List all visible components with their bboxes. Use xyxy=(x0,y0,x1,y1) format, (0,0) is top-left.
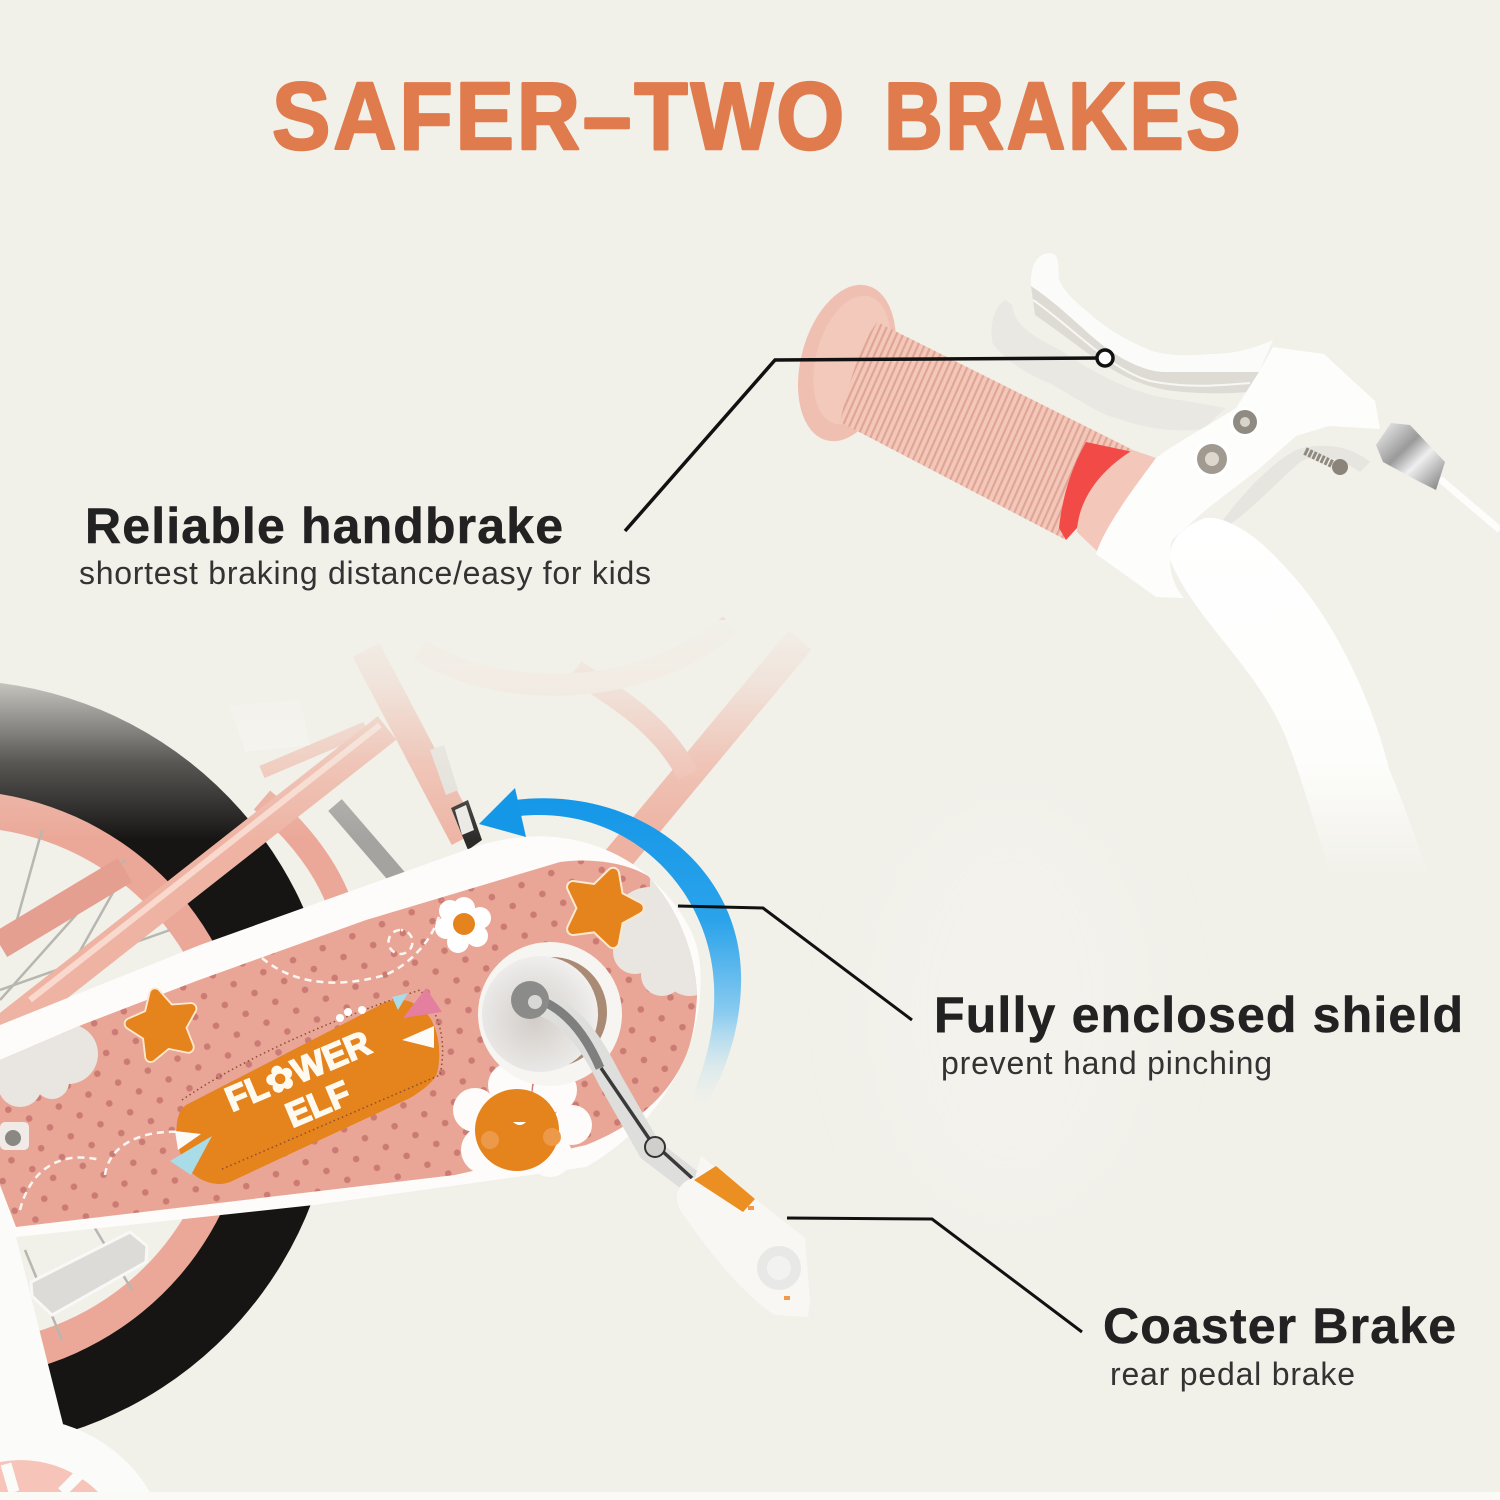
clamp screws xyxy=(1193,407,1348,478)
leader line: handbrake xyxy=(625,350,1113,531)
callout: reliable handbrake xyxy=(79,498,651,591)
brake lever xyxy=(1031,253,1273,393)
illustration: handlebar and brake lever xyxy=(782,253,1500,910)
flower elf badge: ELF xyxy=(280,1074,356,1135)
illustration: rear wheel and frame xyxy=(0,620,820,1447)
guard white shell xyxy=(0,836,701,1237)
flower elf badge xyxy=(176,990,443,1184)
callout: coaster brake: Coaster Brake xyxy=(1103,1298,1456,1354)
title: SAFER–TWO xyxy=(272,63,847,170)
callout: fully enclosed shield: Fully enclosed shield xyxy=(934,987,1463,1043)
callout: coaster brake xyxy=(1103,1298,1456,1392)
flower xyxy=(435,897,491,953)
fender piece xyxy=(262,800,340,905)
callout: coaster brake: rear pedal brake xyxy=(1110,1356,1355,1392)
flower elf badge: FL✿WER xyxy=(220,1023,377,1119)
leader line: coaster brake xyxy=(787,1218,1082,1332)
pedal xyxy=(677,1156,810,1317)
dashed decorative trails xyxy=(20,900,442,1210)
callout: fully enclosed shield: prevent hand pinching xyxy=(941,1045,1272,1081)
rotation arrow xyxy=(479,788,741,1105)
smiling sun flower xyxy=(453,1063,592,1177)
guard pink printed panel xyxy=(0,860,697,1227)
crank hub disc xyxy=(478,942,622,1086)
ghost brake lever xyxy=(991,300,1226,430)
title: BRAKES xyxy=(884,63,1243,170)
top fade overlay xyxy=(0,620,820,840)
pedal reflector xyxy=(31,1232,147,1315)
callout: fully enclosed shield xyxy=(934,987,1463,1081)
small bolt xyxy=(0,1122,29,1150)
silver seat post rod xyxy=(335,805,398,878)
down tube xyxy=(617,640,800,860)
callout: reliable handbrake: Reliable handbrake xyxy=(85,498,563,554)
cable and barrel adjuster xyxy=(1376,423,1500,530)
curved head tube xyxy=(575,670,688,775)
chain guard xyxy=(0,836,718,1240)
right cloud xyxy=(613,878,697,996)
star right xyxy=(561,863,645,946)
leader line: shield xyxy=(678,906,912,1020)
handlebar tube xyxy=(1170,518,1430,910)
pale top tube xyxy=(420,625,730,685)
illustration: training wheel xyxy=(0,1418,1500,1500)
illustration: white fork leg xyxy=(0,1180,63,1492)
title xyxy=(272,63,1243,170)
rack strut xyxy=(262,728,366,772)
hand grip xyxy=(782,274,1156,554)
left cloud xyxy=(0,1024,98,1107)
seat tube xyxy=(366,650,465,838)
rear tyre xyxy=(0,683,337,1447)
callout: reliable handbrake: shortest braking distance/easy for kids xyxy=(79,555,651,591)
rear rim xyxy=(0,794,251,1376)
confetti triangles xyxy=(170,988,442,1175)
spokes xyxy=(0,830,170,1340)
safety labels xyxy=(430,745,482,850)
seat stay tube xyxy=(0,728,387,1032)
crank arm xyxy=(511,981,692,1182)
rear reflector xyxy=(230,700,310,752)
star left xyxy=(125,986,200,1059)
chain stay xyxy=(0,870,125,945)
brake clamp body xyxy=(1096,347,1380,598)
